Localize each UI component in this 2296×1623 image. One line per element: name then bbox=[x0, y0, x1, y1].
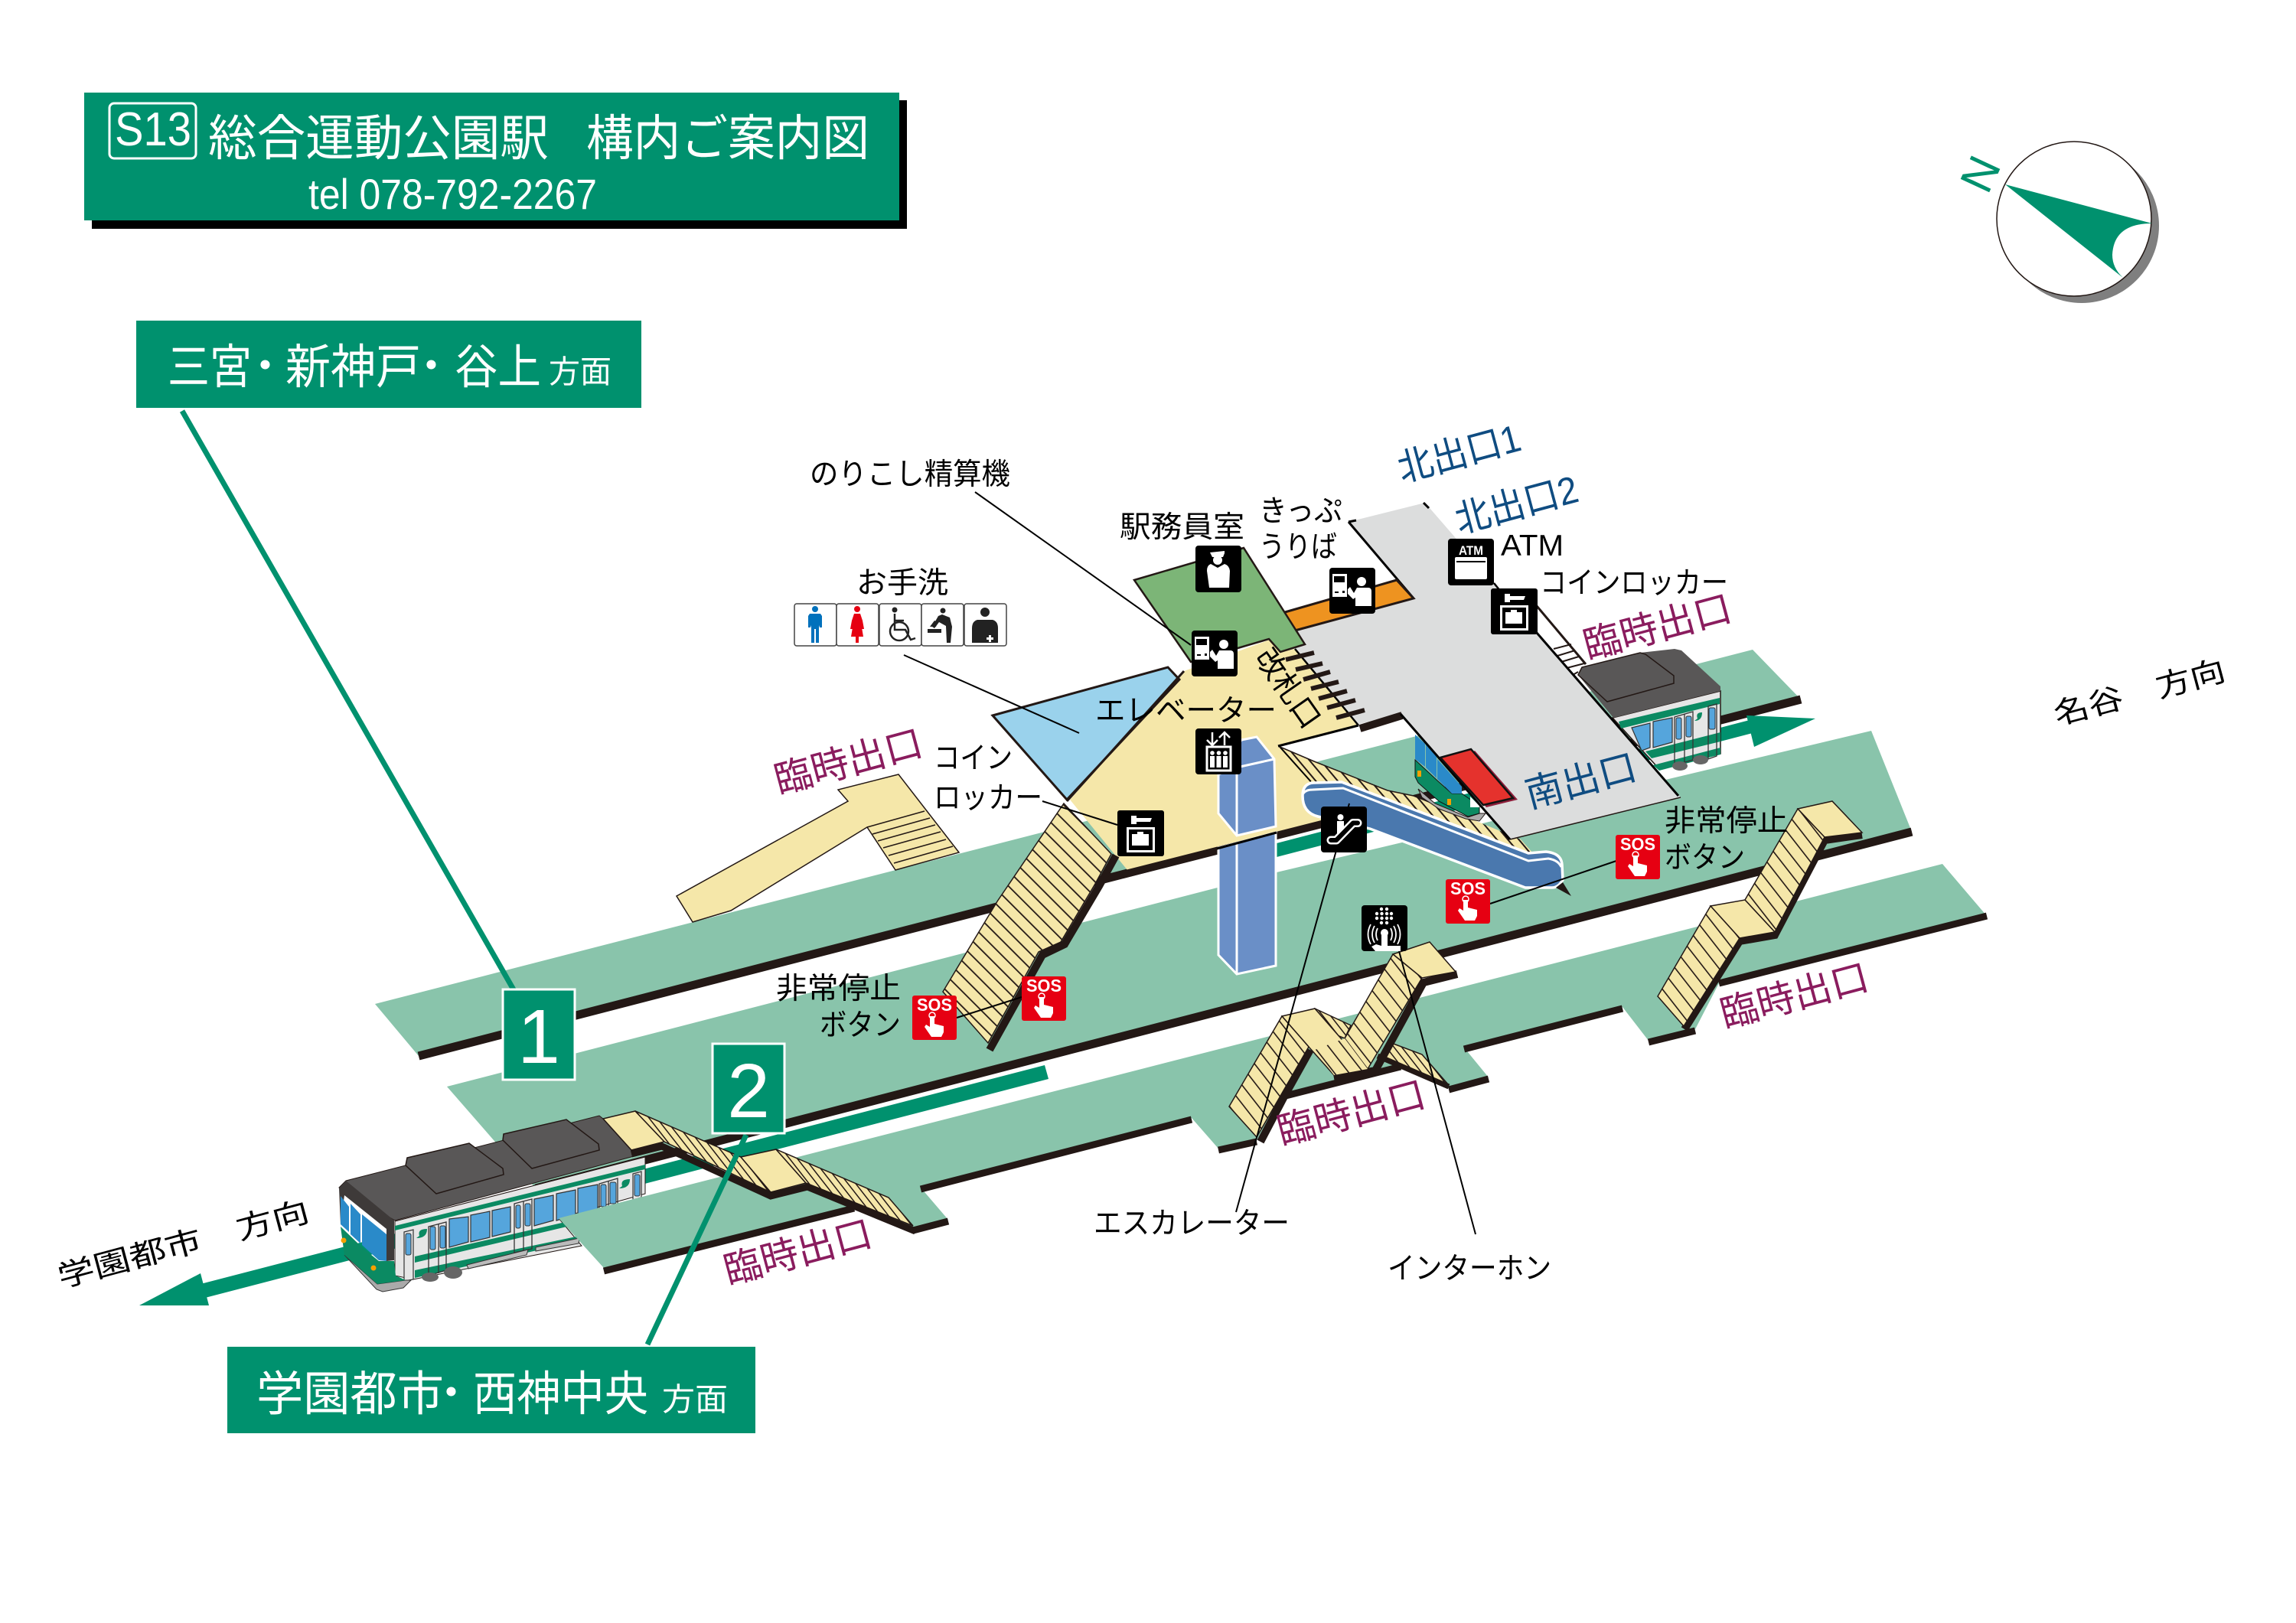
labels: black: ロッカー bbox=[934, 782, 1042, 815]
labels: black: コイン bbox=[934, 742, 1013, 775]
direction line 2 bbox=[647, 1135, 746, 1344]
washroom area bbox=[993, 667, 1179, 800]
labels: temporary exits: 臨時出口 bbox=[770, 722, 927, 802]
icon: intercom bbox=[1362, 905, 1407, 951]
stairs: lower right bbox=[1658, 801, 1862, 1029]
stairs: lower middle bbox=[1229, 942, 1457, 1142]
icon: SOS button right bbox=[1616, 834, 1660, 879]
station office area bbox=[1134, 548, 1305, 662]
stairs: main concourse to platform bbox=[943, 803, 1116, 1050]
direction panel: 学園都市: 方面 bbox=[662, 1382, 728, 1417]
direction panel: 学園都市 bbox=[227, 1347, 755, 1433]
label: north exit 2: 北出口2 bbox=[1450, 468, 1583, 542]
train: lower left bbox=[339, 1116, 645, 1292]
direction panel: 三宮: ･ bbox=[419, 341, 443, 393]
icon: SOS button left 1: SOS bbox=[917, 995, 952, 1015]
platform: lower bbox=[559, 864, 1987, 1271]
labels: black: ATM bbox=[1501, 530, 1564, 562]
labels: black: ボタン bbox=[820, 1009, 901, 1042]
labels: black: のりこし精算機 bbox=[810, 458, 1010, 491]
direction panel: 三宮 bbox=[136, 321, 641, 408]
direction panel: 三宮: ･ bbox=[253, 341, 277, 393]
labels: black: エスカレーター bbox=[1094, 1207, 1290, 1240]
station name: 総合運動公園駅 bbox=[208, 111, 549, 166]
icon: ticket machine bbox=[1329, 568, 1375, 614]
icon row: washroom facilities bbox=[794, 604, 1006, 646]
direction panel: 三宮: 谷上 bbox=[455, 341, 541, 394]
elevator shaft bbox=[1217, 737, 1277, 974]
icon: SOS button center bbox=[1446, 878, 1490, 924]
stairs: behind escalator bbox=[1278, 746, 1533, 869]
platform sign 1: 1 bbox=[517, 994, 560, 1080]
stairs: upper left bbox=[677, 774, 959, 922]
direction panel: 学園都市: 西神中央 bbox=[473, 1368, 648, 1421]
leader lines bbox=[904, 492, 1616, 1234]
labels: black: きっぷ bbox=[1259, 495, 1342, 528]
telephone: tel 078-792-2267 bbox=[308, 170, 597, 218]
direction panel: 三宮: 三宮 bbox=[168, 341, 252, 394]
ticket area bbox=[1280, 580, 1414, 631]
direction line 1 bbox=[182, 411, 514, 991]
train: middle bbox=[1401, 714, 1510, 839]
labels: black: エレベーター bbox=[1095, 695, 1277, 728]
stairs: upper right small bbox=[1537, 606, 1586, 677]
platform sign 1 bbox=[503, 989, 575, 1080]
icon: elevator bbox=[1195, 728, 1241, 774]
concourse floor bbox=[1070, 640, 1357, 870]
labels: black: 非常停止 bbox=[1665, 805, 1788, 838]
icon: ATM bbox=[1448, 539, 1494, 585]
map name: 構内ご案内図 bbox=[586, 111, 869, 166]
concourse edge bbox=[1123, 725, 1358, 875]
labels: temporary exits: 臨時出口 bbox=[1273, 1073, 1430, 1153]
labels: temporary exits bbox=[719, 587, 1873, 1292]
compass bbox=[1950, 142, 2159, 303]
label: direction 学園都市: 学園都市 方向 bbox=[54, 1195, 313, 1294]
direction panel: 三宮: 新神戸 bbox=[285, 341, 421, 394]
labels: black: 非常停止 bbox=[776, 973, 901, 1005]
icon: SOS button left 1 bbox=[912, 995, 957, 1040]
escalator bbox=[1303, 782, 1571, 896]
icon: ATM: ATM bbox=[1459, 543, 1483, 558]
train: upper right bbox=[1578, 649, 1720, 771]
platform: upper bbox=[375, 650, 1801, 1056]
track arrow: towards 名谷 bbox=[1277, 715, 1815, 857]
icon: SOS button left 2: SOS bbox=[1026, 976, 1062, 996]
label: direction 名谷: 名谷 方向 bbox=[2050, 654, 2229, 732]
stairs: lower left bbox=[603, 1111, 915, 1231]
icon: SOS button center: SOS bbox=[1450, 878, 1486, 898]
label: south exit: 南出口 bbox=[1521, 745, 1641, 816]
labels: black: コインロッカー bbox=[1540, 567, 1728, 600]
platform sign 2 bbox=[713, 1044, 784, 1134]
direction panel: 学園都市: ･ bbox=[439, 1367, 463, 1420]
ticket gates bbox=[1286, 653, 1365, 718]
labels: black bbox=[776, 458, 1788, 1286]
label: north exit 1: 北出口1 bbox=[1393, 416, 1525, 490]
track arrow: towards 学園都市 bbox=[139, 1065, 1049, 1305]
concourse left edge bbox=[1067, 671, 1184, 801]
title panel bbox=[84, 93, 907, 229]
direction panel: 学園都市: 学園都市 bbox=[256, 1368, 444, 1421]
labels: black: インターホン bbox=[1388, 1253, 1551, 1286]
icon: station staff bbox=[1195, 546, 1241, 592]
labels: temporary exits: 臨時出口 bbox=[719, 1212, 876, 1292]
icon: coin locker left bbox=[1117, 810, 1164, 856]
labels: black: お手洗 bbox=[856, 567, 948, 600]
labels: black: うりば bbox=[1259, 531, 1337, 564]
labels: black: ボタン bbox=[1665, 842, 1745, 875]
platform: middle bbox=[447, 731, 1912, 1188]
exit hall bbox=[1295, 503, 1681, 839]
platform sign 2: 2 bbox=[727, 1048, 770, 1134]
icon: escalator bbox=[1321, 807, 1367, 852]
labels: temporary exits: 臨時出口 bbox=[1716, 956, 1873, 1036]
labels: temporary exits: 臨時出口 bbox=[1579, 587, 1736, 667]
south exit marker bbox=[1440, 749, 1518, 807]
label: ticket gate: 改札口 bbox=[1248, 643, 1326, 735]
icon: coin locker right bbox=[1491, 588, 1538, 634]
direction panel: 三宮: 方面 bbox=[549, 354, 612, 389]
labels: black: 駅務員室 bbox=[1120, 511, 1244, 544]
north label: N bbox=[1950, 148, 2011, 200]
station number badge: S13 bbox=[115, 103, 191, 156]
icon: SOS button left 2 bbox=[1022, 976, 1066, 1021]
icon: SOS button right: SOS bbox=[1620, 834, 1655, 854]
icon: fare adjustment bbox=[1192, 631, 1238, 676]
